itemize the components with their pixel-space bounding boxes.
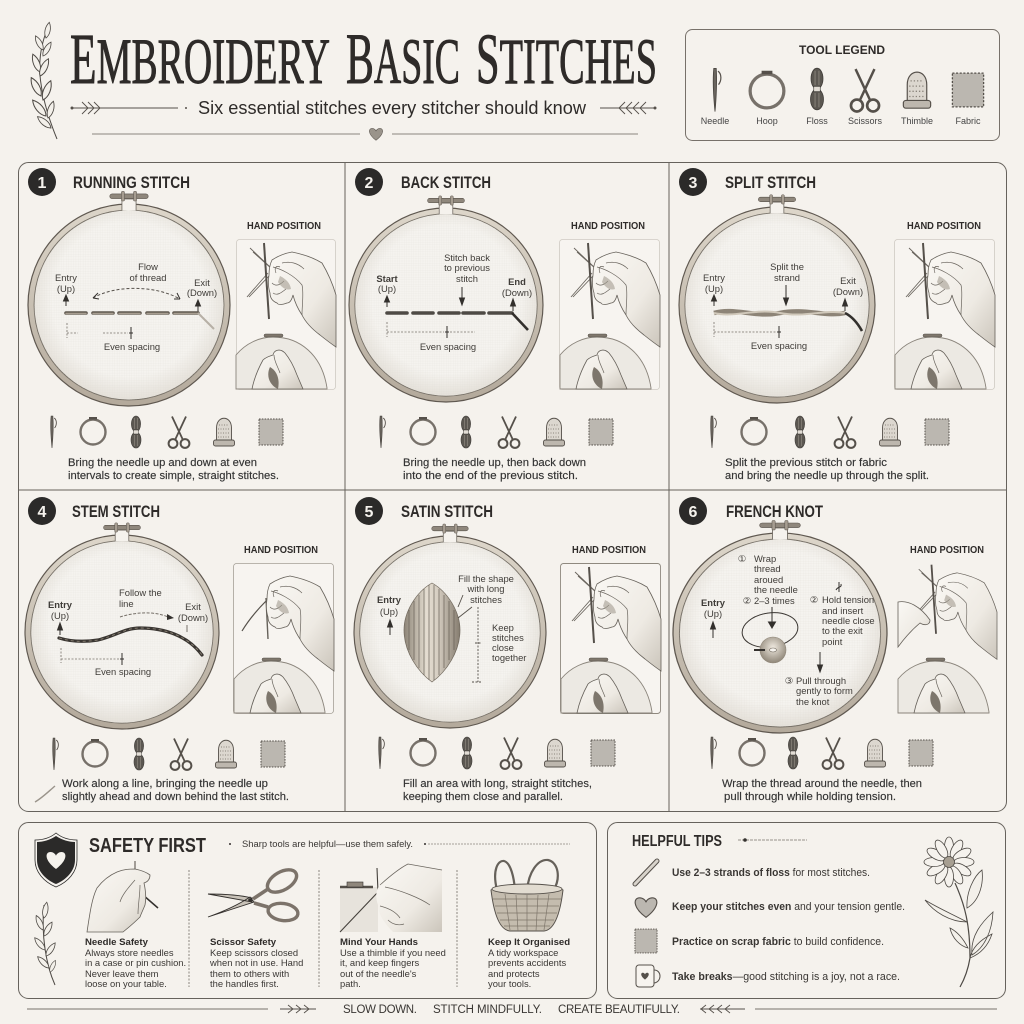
diagram labels: together	[492, 652, 526, 663]
legend labels: Floss	[806, 116, 828, 126]
scissor safety: when not in use. Hand	[209, 957, 303, 968]
tip: heart	[635, 898, 905, 917]
badge 4	[28, 497, 56, 525]
badge 5	[355, 497, 383, 525]
badge 5: 5	[365, 504, 374, 521]
needle safety: in a case or pin cushion.	[85, 957, 186, 968]
legend labels: Needle	[701, 116, 729, 126]
diagram	[703, 261, 863, 351]
description	[403, 778, 592, 803]
title: STITCHES	[476, 19, 657, 99]
scissor safety	[208, 865, 303, 989]
badge 2: 2	[365, 175, 374, 192]
diagram labels: close	[492, 642, 514, 653]
heading: SAFETY FIRST	[89, 835, 206, 857]
title: BASIC	[346, 19, 460, 99]
diagram: Even spacing	[420, 341, 476, 352]
flower	[924, 837, 993, 987]
hoop	[679, 195, 875, 403]
diagram: Entry	[48, 599, 73, 610]
description: and bring the needle up through the split.	[725, 470, 929, 482]
legend labels: Scissors	[848, 116, 882, 126]
diagram: Entry	[55, 272, 77, 283]
panel: back stitch	[349, 168, 660, 482]
diagram labels: Fill the shape	[458, 573, 514, 584]
hand position	[898, 544, 997, 713]
hand position: HAND POSITION	[247, 220, 321, 232]
hand position	[234, 544, 334, 714]
diagram	[55, 261, 217, 352]
panel: french knot	[673, 497, 997, 803]
badge 6: 6	[689, 504, 698, 521]
scissor safety: Scissor Safety	[210, 937, 277, 948]
diagram: to previous	[444, 262, 490, 273]
badge 1	[28, 168, 56, 196]
tool icons	[53, 738, 285, 770]
subtitle with ornaments: Six essential stitches every stitcher should know	[198, 98, 587, 118]
heading: SPLIT STITCH	[725, 174, 816, 192]
description	[722, 778, 922, 803]
description: keeping them close and parallel.	[403, 791, 563, 803]
diagram: Exit	[185, 601, 201, 612]
tool icons	[711, 737, 933, 769]
tool icons	[711, 416, 949, 448]
tip: heart: Keep your stitches even and your tension gentle.	[672, 901, 905, 913]
keep it organised: prevents accidents	[488, 957, 566, 968]
stitches grid frame	[18, 162, 1006, 812]
diagram: to the exit	[822, 625, 863, 636]
subtitle with ornaments	[70, 98, 656, 118]
diagram labels: Entry	[377, 594, 402, 605]
legend heading: TOOL LEGEND	[799, 43, 885, 57]
diagram: Entry	[701, 597, 726, 608]
badge 1: 1	[38, 175, 47, 192]
diagram: Follow the	[119, 587, 162, 598]
legend icons	[713, 68, 984, 112]
description: Work along a line, bringing the needle up	[62, 778, 268, 790]
hand position: HAND POSITION	[244, 544, 318, 556]
diagram: Wrap	[754, 553, 776, 564]
scissor safety: Keep scissors closed	[210, 947, 298, 958]
diagram: Exit	[194, 277, 210, 288]
description: Split the previous stitch or fabric	[725, 457, 888, 469]
tool icons	[380, 416, 613, 448]
scissor safety: them to others with	[210, 968, 289, 979]
diagram: Split the	[770, 261, 804, 272]
heading: HELPFUL TIPS	[632, 833, 722, 850]
diagram: Start	[376, 273, 398, 284]
mind your hands: Use a thimble if you need	[340, 947, 446, 958]
diagram: point	[822, 636, 843, 647]
diagram: (Up)	[705, 283, 723, 294]
keep it organised: Keep It Organised	[488, 937, 570, 948]
heading: RUNNING STITCH	[73, 174, 190, 192]
diagram: aroued	[754, 574, 783, 585]
diagram labels	[377, 573, 526, 682]
heading: SATIN STITCH	[401, 503, 493, 521]
hand position	[894, 220, 995, 390]
description	[403, 457, 586, 482]
legend labels: Fabric	[955, 116, 981, 126]
diagram labels: stitches	[470, 594, 502, 605]
diagram: the knot	[796, 696, 830, 707]
diagram	[701, 553, 875, 707]
diagram labels: stitches	[492, 632, 524, 643]
panel: split stitch	[679, 168, 995, 482]
badge 4: 4	[38, 504, 47, 521]
panel: safety first	[18, 822, 596, 998]
diagram: gently to form	[796, 685, 853, 696]
diagram: ③	[785, 675, 793, 686]
legend labels	[701, 116, 981, 126]
hand position: HAND POSITION	[910, 544, 984, 556]
diagram: Hold tension	[822, 594, 874, 605]
diagram: ①	[738, 553, 746, 564]
keep it organised	[488, 860, 570, 989]
satin leaf	[404, 583, 460, 682]
diagram: End	[508, 276, 526, 287]
badge 6	[679, 497, 707, 525]
diagram labels: Keep	[492, 622, 514, 633]
needle safety: Always store needles	[85, 947, 174, 958]
tip: mug	[636, 965, 900, 987]
diagram: (Up)	[378, 283, 396, 294]
diagram: (Up)	[57, 283, 75, 294]
tip: mug: Take breaks—good stitching is a joy, not a race.	[672, 971, 900, 983]
panel: satin stitch	[354, 497, 661, 803]
diagram: ②	[743, 595, 751, 606]
sprig	[33, 902, 57, 985]
tool icons	[379, 737, 615, 769]
panel: tool legend	[686, 30, 1000, 140]
description: Bring the needle up, then back down	[403, 457, 586, 469]
icon: shield	[35, 833, 77, 887]
needle mark	[35, 786, 55, 802]
description	[725, 457, 929, 482]
diagram: Exit	[840, 275, 856, 286]
badge 3: 3	[689, 175, 698, 192]
panel: running stitch	[28, 168, 336, 482]
needle safety: Needle Safety	[85, 937, 149, 948]
keep it organised: A tidy workspace	[488, 947, 558, 958]
dashed separators	[189, 870, 457, 987]
mind your hands: out of the needle's	[340, 968, 417, 979]
hoop	[349, 196, 543, 402]
diagram: Even spacing	[95, 666, 151, 677]
diagram: strand	[774, 272, 800, 283]
description: intervals to create simple, straight stitches.	[68, 470, 279, 482]
title: EMBROIDERY	[70, 19, 330, 99]
diagram: (Up)	[704, 608, 722, 619]
description: into the end of the previous stitch.	[403, 470, 578, 482]
needle safety: loose on your table.	[85, 978, 167, 989]
diagram: of thread	[129, 272, 167, 283]
diagram labels: with long	[466, 583, 505, 594]
diagram: line	[119, 598, 134, 609]
diagram labels: (Up)	[380, 606, 398, 617]
tip: floss: Use 2–3 strands of floss for most stitches.	[672, 867, 870, 879]
description: Bring the needle up and down at even	[68, 457, 257, 469]
footer motto	[27, 1004, 997, 1016]
footer motto: STITCH MINDFULLY.	[433, 1004, 542, 1016]
hoop	[354, 524, 546, 728]
description: pull through while holding tension.	[724, 791, 896, 803]
diagram: (Down)	[178, 612, 208, 623]
keep it organised: and protects	[488, 968, 540, 979]
diagram: (Up)	[51, 610, 69, 621]
heading	[632, 833, 807, 850]
hoop	[28, 191, 230, 406]
hand position: HAND POSITION	[571, 220, 645, 232]
tool icons	[51, 416, 283, 448]
divider with heart	[92, 128, 638, 140]
diagram: (Down)	[833, 286, 863, 297]
mind your hands	[340, 864, 446, 989]
tip: fabric: Practice on scrap fabric to build confidence.	[672, 936, 884, 948]
second hand	[898, 602, 930, 647]
hand position: HAND POSITION	[907, 220, 981, 232]
scissor safety: the handles first.	[210, 978, 279, 989]
description: Fill an area with long, straight stitches,	[403, 778, 592, 790]
diagram: Stitch back	[444, 252, 490, 263]
description	[68, 457, 279, 482]
diagram: (Down)	[187, 287, 217, 298]
heading: FRENCH KNOT	[726, 503, 823, 521]
diagram: Even spacing	[104, 341, 160, 352]
diagram: Flow	[138, 261, 158, 272]
badge 2	[355, 168, 383, 196]
sprig: title laurel	[28, 22, 57, 139]
diagram: Entry	[703, 272, 725, 283]
hand position	[560, 220, 660, 390]
footer motto: SLOW DOWN.	[343, 1004, 417, 1016]
hoop	[25, 523, 219, 729]
mind your hands: path.	[340, 978, 361, 989]
diagram: thread	[754, 563, 781, 574]
diagram: (Down)	[502, 287, 532, 298]
hoop	[673, 520, 887, 733]
tip: fabric	[635, 929, 884, 953]
diagram: Pull through	[796, 675, 846, 686]
panel: stem stitch	[25, 497, 334, 803]
legend labels: Hoop	[756, 116, 778, 126]
diagram	[48, 587, 208, 677]
hand position	[560, 544, 661, 714]
description: slightly ahead and down behind the last stitch.	[62, 791, 289, 803]
hand position	[236, 220, 336, 390]
diagram: 2–3 times	[754, 595, 795, 606]
diagram: Even spacing	[751, 340, 807, 351]
diagram	[376, 252, 532, 352]
diagram: needle close	[822, 615, 875, 626]
panel: helpful tips	[608, 822, 1006, 998]
diagram: and insert	[822, 605, 864, 616]
mind your hands: it, and keep fingers	[340, 957, 420, 968]
footer motto: CREATE BEAUTIFULLY.	[558, 1004, 680, 1016]
mind your hands: Mind Your Hands	[340, 937, 418, 948]
diagram: the needle	[754, 584, 798, 595]
tagline: Sharp tools are helpful—use them safely.	[242, 839, 413, 850]
heading: STEM STITCH	[72, 503, 160, 521]
badge 3	[679, 168, 707, 196]
keep it organised: your tools.	[488, 978, 531, 989]
needle safety	[85, 861, 186, 989]
description	[62, 778, 289, 803]
hand position: HAND POSITION	[572, 544, 646, 556]
description: Wrap the thread around the needle, then	[722, 778, 922, 790]
tip: floss	[635, 861, 870, 884]
needle safety: Never leave them	[85, 968, 159, 979]
legend labels: Thimble	[901, 116, 933, 126]
heading: BACK STITCH	[401, 174, 491, 192]
diagram: stitch	[456, 273, 478, 284]
diagram: ②	[810, 594, 818, 605]
